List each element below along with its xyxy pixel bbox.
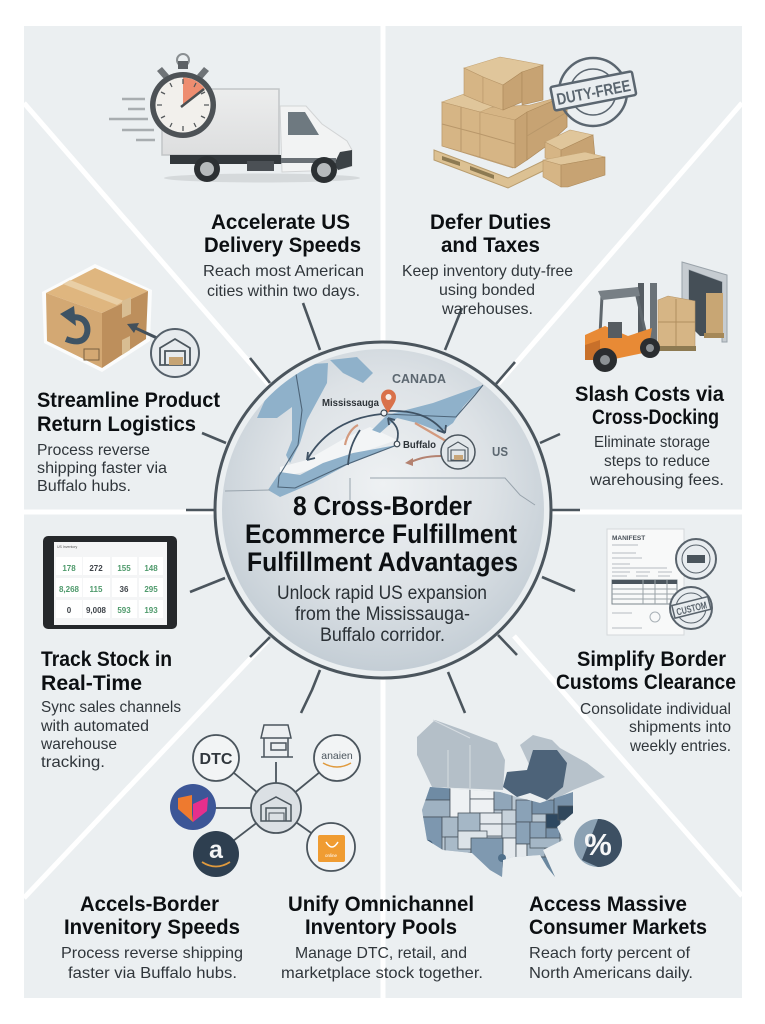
description: Consolidate individual (580, 701, 731, 718)
description: Keep inventory duty-free (402, 263, 573, 280)
description: Buffalo hubs. (37, 478, 131, 495)
heading: Simplify Border (577, 647, 727, 671)
heading: Invenitory Speeds (64, 915, 240, 939)
description: steps to reduce (604, 453, 710, 470)
heading: Inventory Pools (305, 915, 457, 939)
description: faster via Buffalo hubs. (68, 965, 237, 982)
icon: pallet of boxes with duty-free stamp (434, 57, 636, 188)
description: Process reverse shipping (61, 945, 243, 962)
heading: and Taxes (441, 233, 540, 257)
heading (575, 382, 725, 429)
icon: manifest and stamps: CUSTOM (675, 600, 708, 618)
subtitle (277, 583, 487, 646)
description (281, 945, 483, 982)
heading: Track Stock in (41, 647, 172, 671)
title: 8 Cross-Border (293, 491, 472, 521)
icon: inventory tablet: US Inventory (57, 545, 77, 549)
description: Reach forty percent of (529, 945, 691, 962)
heading (41, 647, 172, 695)
icon: inventory tablet: 148 (144, 564, 158, 573)
panel: defer duties (402, 57, 636, 318)
heading: Customs Clearance (556, 670, 736, 694)
panel: returns (37, 264, 220, 495)
heading: Access Massive (529, 892, 687, 916)
icon: omnichannel network: online (325, 853, 337, 858)
heading (37, 388, 220, 436)
description: Sync sales channels (41, 699, 181, 716)
description: using bonded (439, 282, 535, 299)
icon: location pin (381, 390, 396, 416)
heading (556, 647, 736, 694)
heading: Return Logistics (37, 412, 196, 436)
description (529, 945, 693, 982)
description: North Americans daily. (529, 965, 693, 982)
icon: inventory tablet: 593 (117, 606, 131, 615)
icon: omnichannel network: a (209, 836, 224, 864)
central hub circle (215, 342, 551, 678)
icon: inventory tablet: 155 (117, 564, 131, 573)
heading: Consumer Markets (529, 915, 707, 939)
description: Process reverse (37, 442, 150, 459)
panel: customs clearance (556, 529, 736, 755)
panel: cross-border inventory (61, 725, 360, 982)
description: with automated (40, 718, 149, 735)
panel: cross-docking (575, 262, 727, 489)
heading: Streamline Product (37, 388, 220, 412)
icon: omnichannel network: DTC (200, 751, 233, 768)
panel: accelerate delivery (109, 54, 364, 300)
heading: Accels-Border (80, 892, 220, 916)
description (203, 263, 364, 300)
icon: inventory tablet: 295 (144, 585, 158, 594)
heading: Accelerate US (211, 210, 350, 234)
icon: inventory tablet: 178 (62, 564, 76, 573)
heading: Unify Omnichannel (288, 892, 474, 916)
description: marketplace stock together. (281, 965, 483, 982)
map label: CANADA: CANADA (392, 372, 446, 386)
map label: Mississauga: Mississauga (322, 398, 379, 409)
icon: north america population map: % (584, 827, 612, 862)
icon: inventory tablet (43, 536, 177, 629)
subtitle: Buffalo corridor. (320, 625, 445, 646)
description (589, 434, 724, 489)
title (245, 491, 518, 577)
map: Great Lakes corridor (225, 357, 535, 505)
description (61, 945, 243, 982)
icon: omnichannel network: anaien (321, 750, 353, 762)
map label: US: US (492, 445, 508, 459)
icon: manifest and stamps (607, 529, 716, 635)
description (37, 442, 167, 495)
icon: return box with warehouse (42, 264, 199, 377)
icon: warehouse badge (441, 435, 475, 469)
heading: Slash Costs via (575, 382, 725, 406)
icon: pallet of boxes with duty-free stamp: DUTY-FREE (555, 77, 632, 109)
connector ticks (186, 303, 580, 713)
icon: inventory tablet: 36 (120, 585, 129, 594)
panel: consumer markets (417, 720, 707, 982)
heading: Cross-Docking (592, 405, 719, 429)
map label: Buffalo: Buffalo (403, 440, 436, 451)
description: tracking. (41, 754, 105, 771)
icon: delivery truck with stopwatch (109, 54, 360, 183)
heading (529, 892, 707, 939)
description: Reach most American (203, 263, 364, 280)
heading (430, 210, 551, 257)
icon: north america population map (417, 720, 622, 880)
heading (64, 892, 240, 939)
heading: Delivery Speeds (204, 233, 361, 257)
icon: manifest and stamps: MANIFEST (612, 535, 645, 542)
description: Eliminate storage (594, 434, 710, 451)
panel: omnichannel pools (281, 892, 483, 982)
icon: inventory tablet: 0 (67, 606, 72, 615)
title: Fulfillment Advantages (247, 547, 518, 577)
route arrows (307, 411, 446, 465)
description: warehouses. (441, 301, 533, 318)
icon: omnichannel network (170, 725, 360, 877)
description: shipments into (629, 719, 731, 736)
title: Ecommerce Fulfillment (245, 519, 517, 549)
description: shipping faster via (37, 460, 167, 477)
description (402, 263, 573, 318)
description (40, 699, 181, 771)
heading (204, 210, 361, 257)
description: Manage DTC, retail, and (295, 945, 467, 962)
subtitle: Unlock rapid US expansion (277, 583, 487, 604)
description: cities within two days. (207, 283, 360, 300)
icon: inventory tablet: 272 (89, 564, 103, 573)
heading: Real-Time (41, 671, 142, 695)
icon: inventory tablet: 8,268 (59, 585, 80, 594)
description (580, 701, 731, 755)
description: weekly entries. (629, 738, 731, 755)
description: warehouse (40, 736, 117, 753)
heading: Defer Duties (430, 210, 551, 234)
icon: forklift at loading dock (585, 262, 727, 372)
icon: inventory tablet: 9,008 (86, 606, 107, 615)
panel: real-time stock (40, 536, 181, 771)
heading (288, 892, 474, 939)
icon: inventory tablet: 115 (90, 585, 103, 594)
icon: inventory tablet: 193 (144, 606, 158, 615)
subtitle: from the Mississauga- (295, 604, 470, 625)
description: warehousing fees. (589, 472, 724, 489)
